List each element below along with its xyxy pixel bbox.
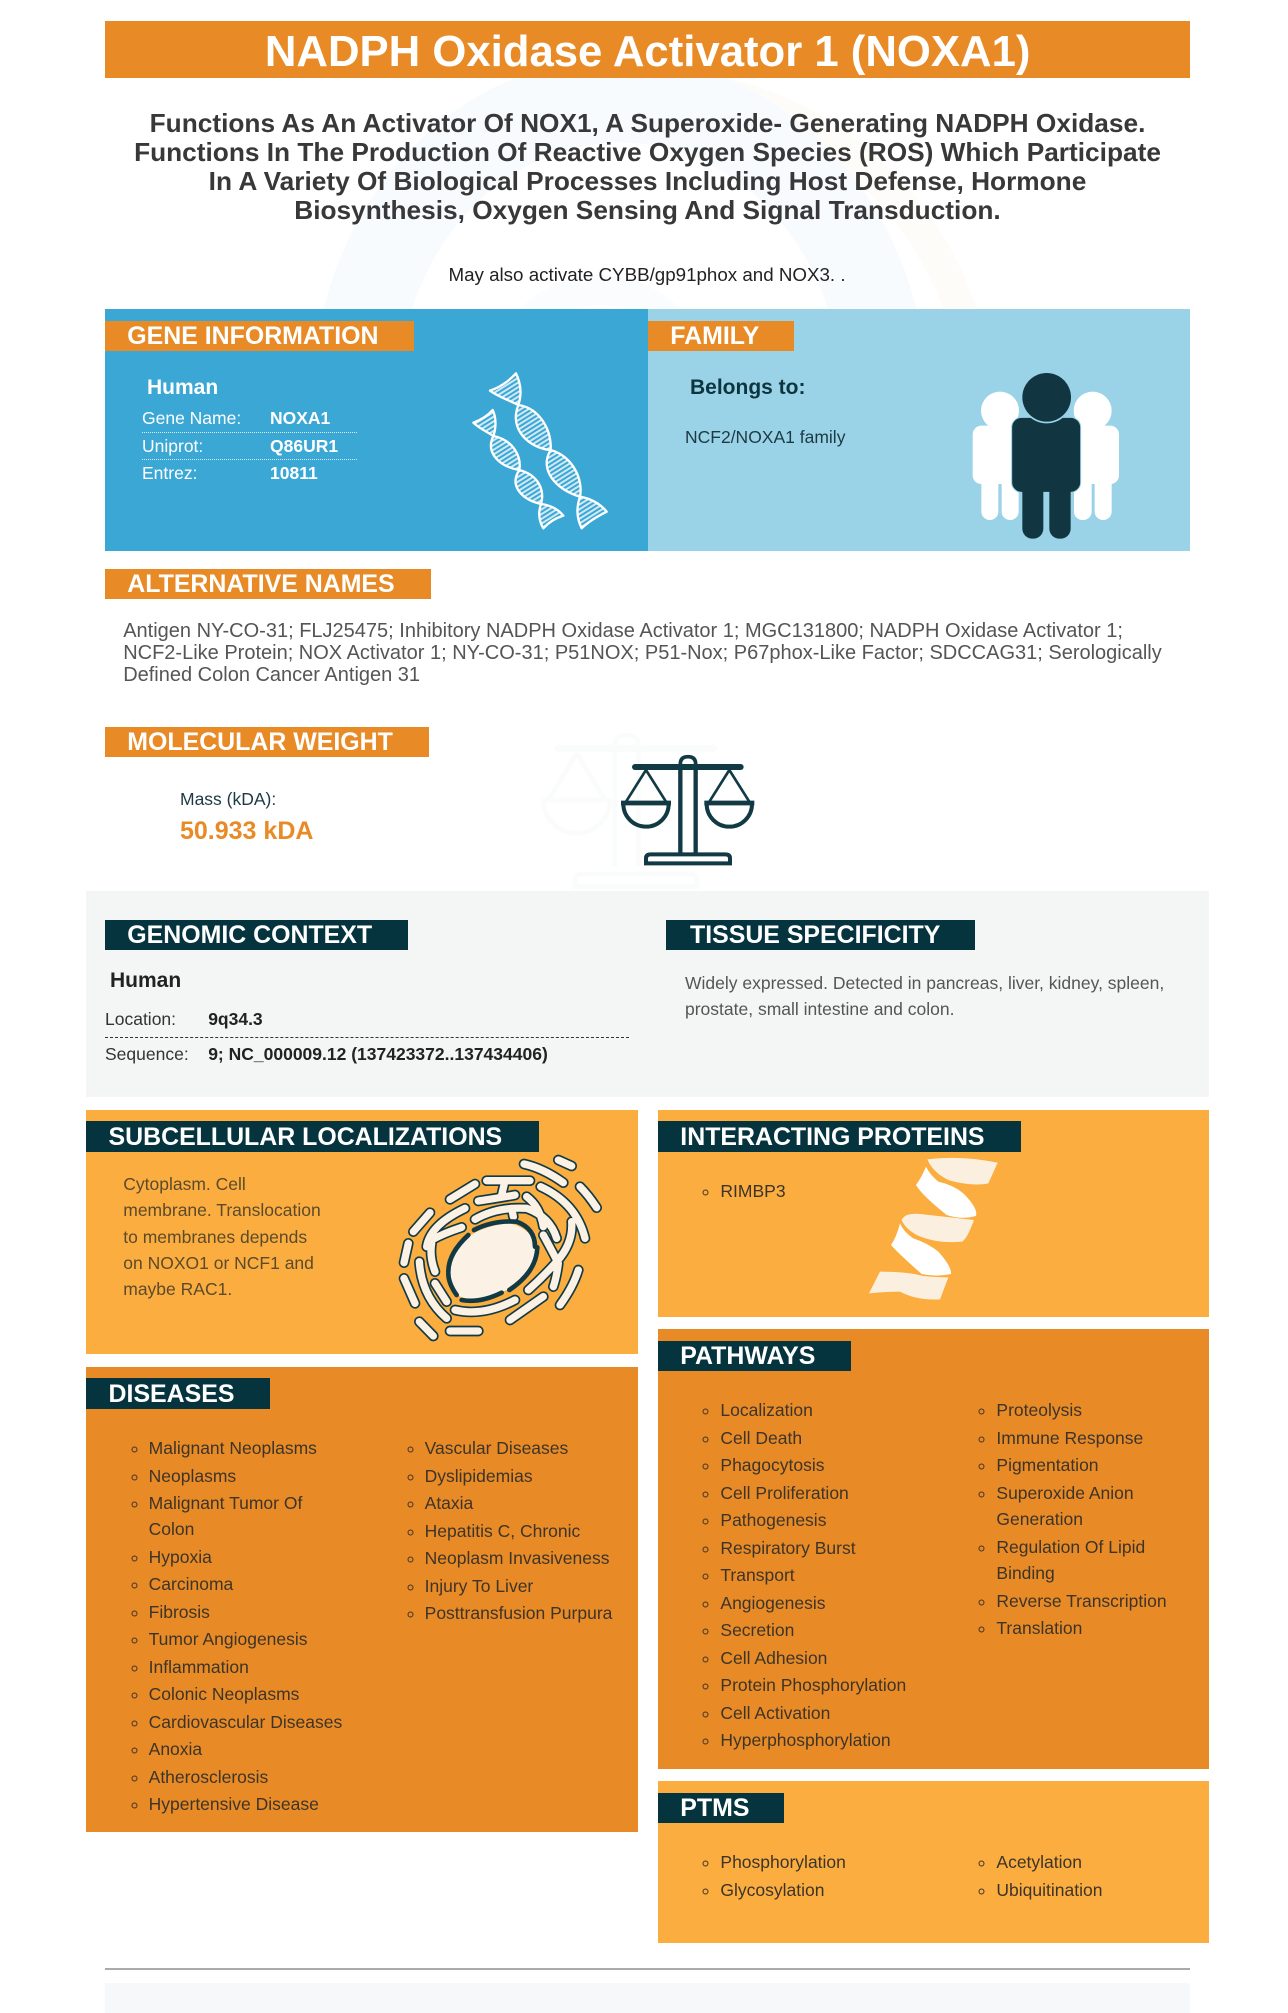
panel: genomic context and tissue specificity [86, 891, 1209, 1097]
gene info table: NOXA1 [270, 408, 330, 428]
ptms list column 2: Ubiquitination [996, 1880, 1102, 1900]
tissue specificity text: Widely expressed. Detected in pancreas, liver, kidney, spleen, [685, 973, 1164, 993]
diseases list column 2: Posttransfusion Purpura [425, 1603, 612, 1623]
diseases list column 1: Malignant Tumor Of [149, 1493, 302, 1513]
genomic location row [105, 1009, 263, 1029]
panel: family [648, 309, 1190, 551]
heading: ptms [658, 1793, 784, 1823]
diseases list column 1: Fibrosis [149, 1602, 210, 1622]
pathways list column 1: Localization [720, 1400, 813, 1420]
description heading: In A Variety Of Biological Processes Including Host Defense, Hormone [209, 166, 1086, 196]
ptms list column 2: Acetylation [996, 1852, 1082, 1872]
alternative names text: NCF2-Like Protein; NOX Activator 1; NY-CO-31; P51NOX; P51-Nox; P67phox-Like Factor; SDCCAG31; Serologically [123, 642, 1162, 664]
pathways list column 1: Protein Phosphorylation [720, 1675, 906, 1695]
pathways list column 1: Cell Activation [720, 1702, 830, 1722]
heading: diseases [86, 1378, 270, 1409]
diseases list column 1: Colon [149, 1519, 194, 1539]
alternative names text: Defined Colon Cancer Antigen 31 [123, 664, 420, 686]
tissue specificity text [685, 973, 1164, 1019]
heading: family [648, 321, 794, 351]
mass value: 50.933 kDA [180, 817, 313, 845]
heading: alternative names: ALTERNATIVE NAMES [127, 570, 395, 598]
diseases list column 1: Neoplasms [149, 1466, 236, 1486]
description heading: Functions In The Production Of Reactive Oxygen Species (ROS) Which Participate [134, 137, 1161, 167]
genomic sequence row [105, 1037, 629, 1070]
diseases list column 1: Anoxia [149, 1739, 202, 1759]
pathways list column 2: Generation [996, 1508, 1083, 1528]
gene info table: Uniprot: [142, 436, 203, 456]
genomic sequence row: Sequence: [105, 1044, 189, 1064]
diseases list column 1: Hypoxia [149, 1546, 212, 1566]
diseases list column 1: Carcinoma [149, 1574, 233, 1594]
secondary description: May also activate CYBB/gp91phox and NOX3. . [448, 264, 846, 285]
description heading: Functions As An Activator Of NOX1, A Superoxide- Generating NADPH Oxidase. [150, 108, 1145, 138]
diseases list column 2: Hepatitis C, Chronic [425, 1520, 580, 1540]
gene info table: 10811 [270, 463, 318, 483]
icon: people group [972, 373, 1119, 539]
genomic location row: 9q34.3 [208, 1009, 263, 1029]
subcellular text: membrane. Translocation [123, 1200, 321, 1220]
subcellular text: maybe RAC1. [123, 1279, 232, 1299]
pathways list column 1: Cell Death [720, 1428, 802, 1448]
pathways list column 2: Translation [996, 1618, 1082, 1638]
ptms list column 1: Glycosylation [720, 1880, 824, 1900]
title banner: NADPH Oxidase Activator 1 (NOXA1) [265, 27, 1030, 76]
pathways list column 2: Regulation Of Lipid [996, 1537, 1145, 1557]
pathways list column 2: Pigmentation [996, 1455, 1099, 1475]
diseases list column 1: Colonic Neoplasms [149, 1684, 299, 1704]
alternative names text: Antigen NY-CO-31; FLJ25475; Inhibitory NADPH Oxidase Activator 1; MGC131800; NADPH Oxidase Activator 1; [123, 620, 1123, 642]
pathways list column 1: Hyperphosphorylation [720, 1730, 891, 1750]
pathways list column 1 [702, 1400, 906, 1750]
tissue specificity text: prostate, small intestine and colon. [685, 999, 954, 1019]
subcellular text [123, 1174, 321, 1299]
panel: interacting proteins [658, 1110, 1209, 1317]
heading: pathways: PATHWAYS [680, 1342, 815, 1370]
belongs to label: Belongs to: [690, 376, 806, 399]
pathways list column 1: Cell Proliferation [720, 1482, 849, 1502]
mass label: Mass (kDA): [180, 789, 276, 809]
diseases list column 2: Vascular Diseases [425, 1438, 568, 1458]
title banner [105, 21, 1190, 78]
icon: balance scale [621, 754, 754, 866]
footer panel [105, 1983, 1190, 2013]
panel: diseases [86, 1367, 638, 1832]
gene info table: Gene Name: [142, 408, 241, 428]
heading: gene information: GENE INFORMATION [127, 322, 378, 350]
pathways list column 1: Transport [720, 1565, 795, 1585]
gene info table: Q86UR1 [270, 436, 338, 456]
pathways list column 2: Proteolysis [996, 1400, 1082, 1420]
diseases list column 1: Hypertensive Disease [149, 1794, 319, 1814]
heading: ptms: PTMS [680, 1794, 749, 1822]
genomic sequence row: 9; NC_000009.12 (137423372..137434406) [208, 1044, 548, 1064]
pathways list column 2 [978, 1400, 1167, 1638]
pathways list column 1: Respiratory Burst [720, 1538, 856, 1558]
pathways list column 1: Cell Adhesion [720, 1648, 827, 1668]
gene info table [142, 376, 357, 483]
icon: faint scale watermark [520, 720, 780, 892]
panel: gene information [105, 309, 648, 551]
genomic human label: Human [110, 969, 181, 992]
diseases list column 1: Inflammation [149, 1656, 249, 1676]
gene info table: Entrez: [142, 463, 197, 483]
ptms list column 1: Phosphorylation [720, 1852, 846, 1872]
icon: DNA helices [472, 372, 608, 530]
pathways list column 1: Phagocytosis [720, 1455, 824, 1475]
diseases list column 1 [132, 1438, 342, 1814]
pathways list column 1: Secretion [720, 1620, 794, 1640]
heading: interacting proteins: INTERACTING PROTEINS [680, 1123, 985, 1151]
subcellular text: on NOXO1 or NCF1 and [123, 1253, 314, 1273]
pathways list column 2: Immune Response [996, 1428, 1143, 1448]
icon: protein helix ribbon [869, 1158, 998, 1300]
diseases list column 2: Ataxia [425, 1493, 473, 1513]
heading: family: FAMILY [670, 322, 759, 350]
gene info table: Human [147, 376, 218, 399]
diseases list column 1: Tumor Angiogenesis [149, 1629, 308, 1649]
heading: molecular weight: MOLECULAR WEIGHT [127, 728, 393, 756]
pathways list column 1: Pathogenesis [720, 1510, 826, 1530]
pathways list column 2: Binding [996, 1563, 1055, 1583]
heading: tissue specificity: TISSUE SPECIFICITY [690, 921, 940, 949]
alternative names text [123, 620, 1162, 686]
ptms list column 2 [978, 1852, 1102, 1900]
background watermark [0, 0, 1288, 900]
diseases list column 1: Cardiovascular Diseases [149, 1712, 342, 1732]
diseases list column 2: Neoplasm Invasiveness [425, 1548, 609, 1568]
heading: pathways [658, 1341, 851, 1371]
ptms list column 1 [702, 1852, 846, 1900]
subcellular text: to membranes depends [123, 1227, 307, 1247]
panel: pathways [658, 1329, 1209, 1769]
heading: genomic context: GENOMIC CONTEXT [127, 921, 372, 949]
description heading [134, 108, 1161, 225]
pathways list column 2: Superoxide Anion [996, 1482, 1134, 1502]
panel: ptms [658, 1781, 1209, 1943]
pathways list column 2: Reverse Transcription [996, 1590, 1167, 1610]
description heading: Biosynthesis, Oxygen Sensing And Signal Transduction. [294, 195, 1001, 225]
pathways list column 1: Angiogenesis [720, 1592, 825, 1612]
genomic location row: Location: [105, 1009, 176, 1029]
diseases list column 1: Atherosclerosis [149, 1766, 268, 1786]
panel: subcellular localizations [86, 1110, 638, 1354]
heading: subcellular localizations: SUBCELLULAR LOCALIZATIONS [109, 1123, 502, 1151]
diseases list column 2: Dyslipidemias [425, 1466, 533, 1486]
diseases list column 1: Malignant Neoplasms [149, 1438, 317, 1458]
family name: NCF2/NOXA1 family [685, 427, 845, 447]
subcellular text: Cytoplasm. Cell [123, 1174, 246, 1194]
diseases list column 2 [408, 1438, 612, 1623]
interacting protein list: RIMBP3 [720, 1181, 786, 1201]
heading: diseases: DISEASES [109, 1380, 234, 1408]
diseases list column 2: Injury To Liver [425, 1576, 533, 1596]
icon: cell with organelles [398, 1154, 602, 1342]
